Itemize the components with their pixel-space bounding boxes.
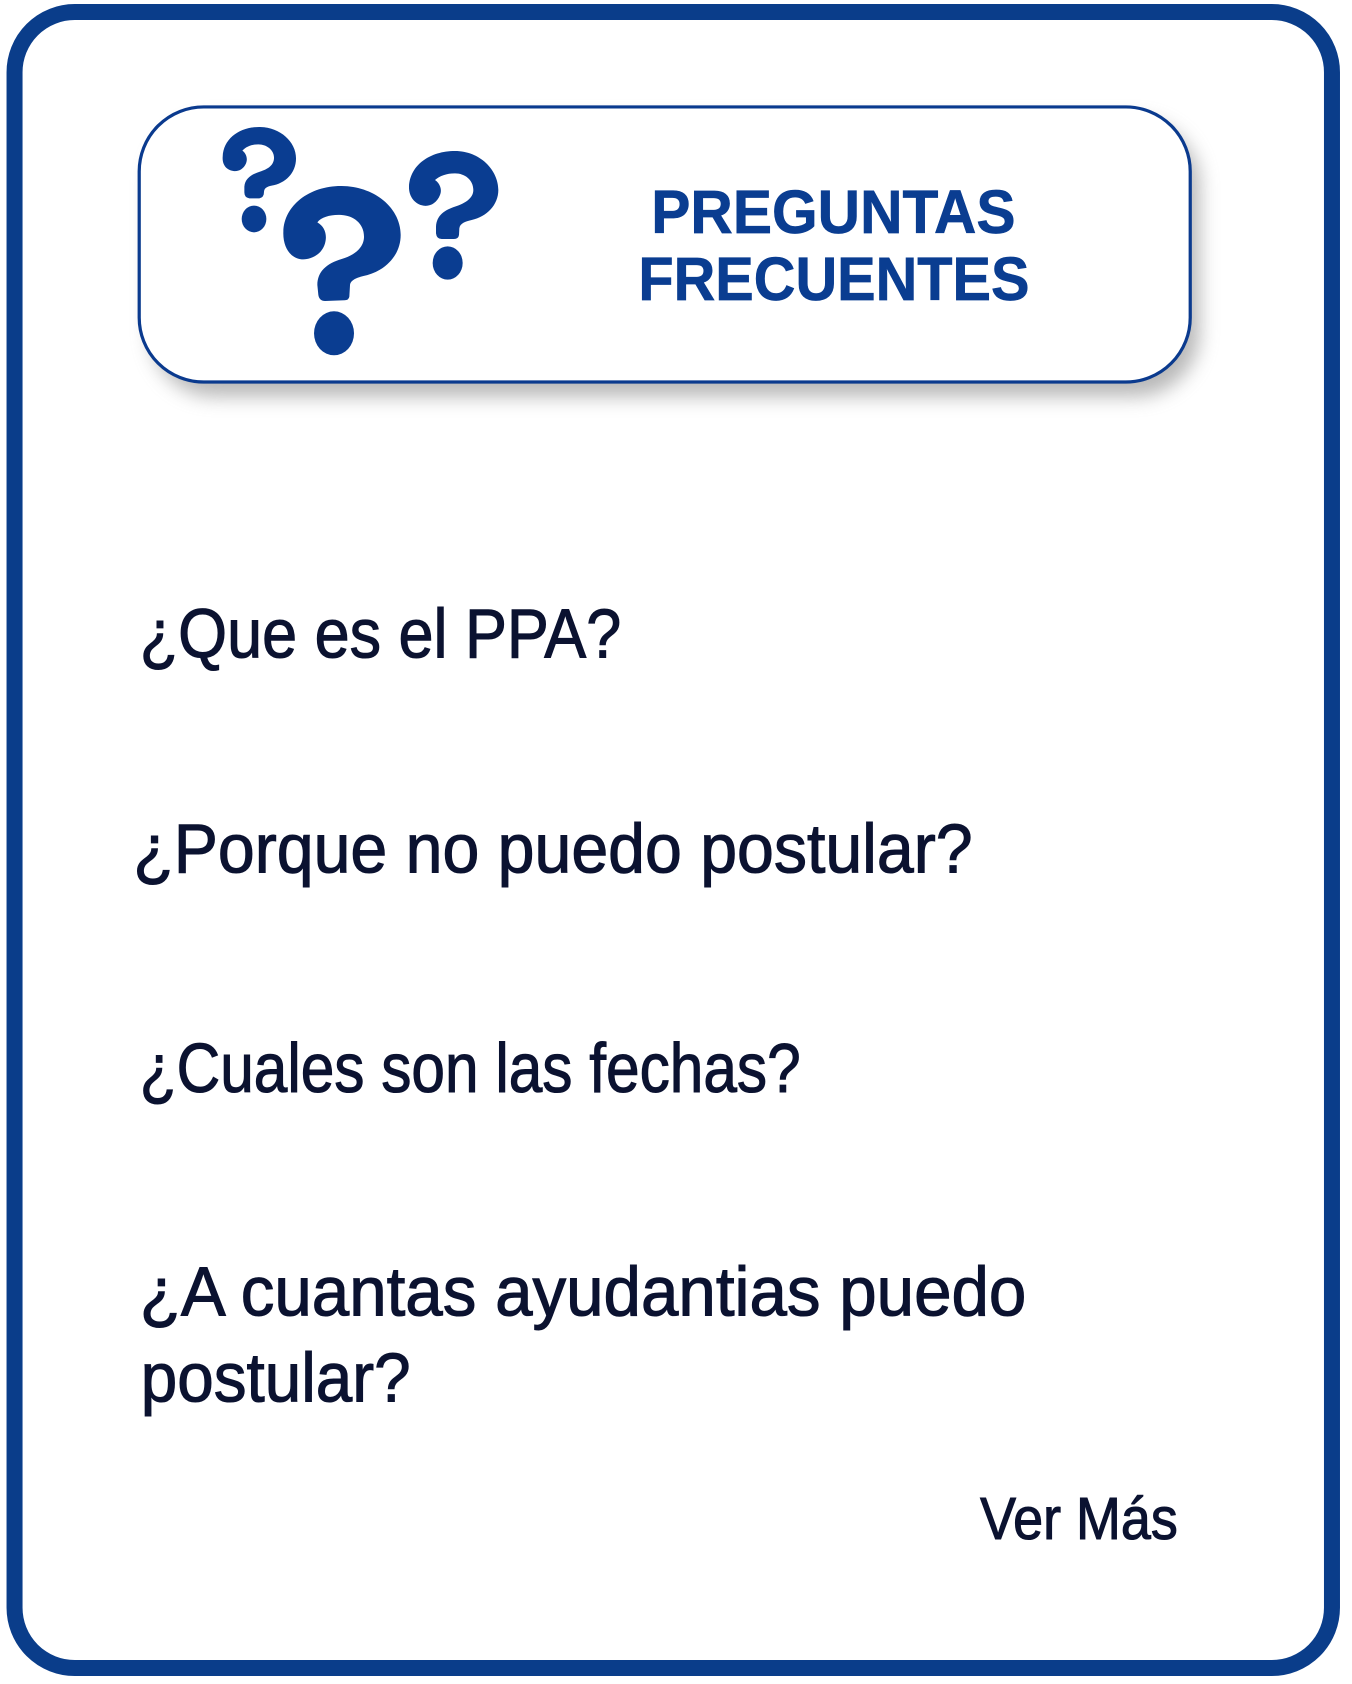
icon: question marks — [223, 127, 498, 355]
question: a cuantas ayudantias puedo postular — [140, 1252, 1026, 1416]
question: que es el PPA: ¿Que es el PPA? — [140, 595, 621, 673]
question: porque no puedo postular: ¿Porque no puedo postular? — [133, 810, 973, 888]
question: a cuantas ayudantias puedo postular: ¿A cuantas ayudantias puedo — [140, 1252, 1026, 1330]
heading: preguntas frecuentes: FRECUENTES — [638, 245, 1030, 313]
link: ver mas: Ver Más — [980, 1485, 1178, 1552]
question: cuales son las fechas: ¿Cuales son las fechas? — [140, 1029, 801, 1107]
heading: preguntas frecuentes — [638, 178, 1030, 313]
question: a cuantas ayudantias puedo postular: postular? — [141, 1338, 411, 1416]
panel: header banner — [139, 107, 1199, 397]
heading: preguntas frecuentes: PREGUNTAS — [651, 178, 1016, 246]
